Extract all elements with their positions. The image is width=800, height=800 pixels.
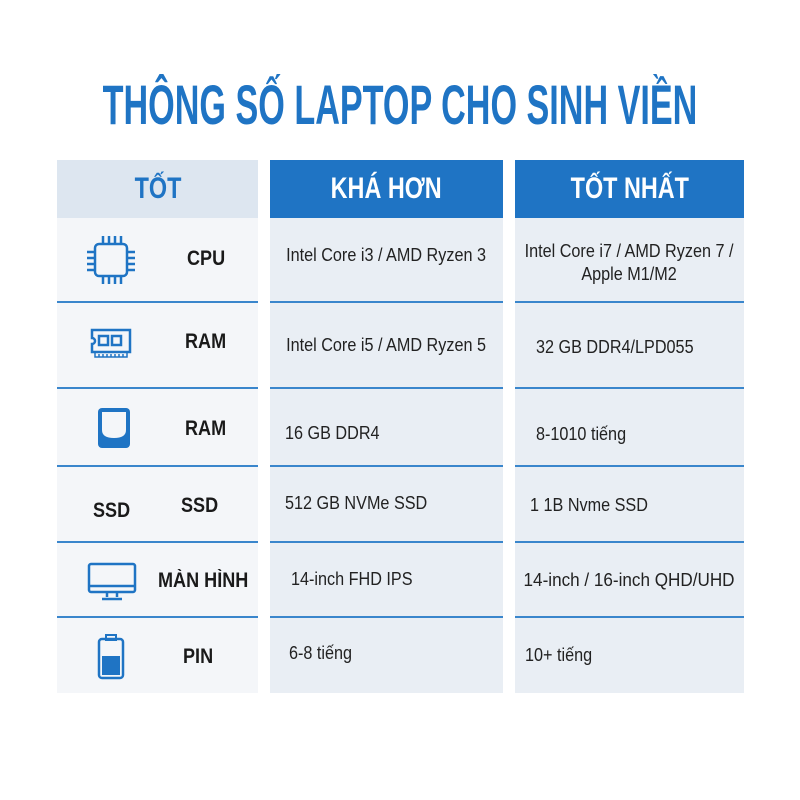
cell: screen: 14-inch / 16-inch QHD/UHD xyxy=(524,570,735,590)
header: TỐT NHẤT: TỐT NHẤT xyxy=(570,172,689,205)
header: TỐT: TỐT xyxy=(134,172,181,205)
cell: storage: 8-1010 tiếng xyxy=(536,424,626,444)
icon: cpu xyxy=(87,236,135,284)
header: TỐT xyxy=(57,160,258,218)
icon: ram xyxy=(90,328,132,358)
label: SSD: SSD xyxy=(181,494,218,517)
cell: cpu: Intel Core i3 / AMD Ryzen 3 xyxy=(287,244,486,264)
icon: monitor xyxy=(88,562,136,600)
cell: cpu: Intel Core i7 / AMD Ryzen 7 / xyxy=(525,241,734,261)
title: THÔNG SỐ LAPTOP CHO SINH VIỀN xyxy=(103,73,697,136)
header: TỐT NHẤT xyxy=(515,160,744,218)
cell: ssd: 1 1B Nvme SSD xyxy=(530,494,648,514)
panel: KHÁ HƠN column xyxy=(270,160,503,693)
label: RAM: RAM xyxy=(185,330,226,353)
icon: drive xyxy=(98,408,130,448)
icon: battery xyxy=(98,634,124,680)
header: KHÁ HƠN: KHÁ HƠN xyxy=(331,172,442,205)
cell: cpu xyxy=(525,241,734,284)
header: KHÁ HƠN xyxy=(270,160,503,218)
panel: TỐT column xyxy=(57,160,258,693)
cell: battery: 6-8 tiếng xyxy=(289,642,352,662)
cell: cpu: Apple M1/M2 xyxy=(582,264,677,284)
cell: ssd: 512 GB NVMe SSD xyxy=(285,492,427,512)
label: CPU: CPU xyxy=(187,247,225,270)
label: MÀN HÌNH: MÀN HÌNH xyxy=(158,569,248,592)
panel: TỐT NHẤT column xyxy=(515,160,744,693)
cell: ram: 32 GB DDR4/LPD055 xyxy=(536,336,694,356)
cell: screen: 14-inch FHD IPS xyxy=(291,568,413,588)
label: RAM (drive row): RAM xyxy=(185,417,226,440)
cell: storage: 16 GB DDR4 xyxy=(285,422,380,442)
cell: battery: 10+ tiếng xyxy=(525,644,592,664)
label: PIN: PIN xyxy=(183,645,213,668)
label: SSD left: SSD xyxy=(93,499,130,522)
cell: ram: Intel Core i5 / AMD Ryzen 5 xyxy=(287,334,486,354)
